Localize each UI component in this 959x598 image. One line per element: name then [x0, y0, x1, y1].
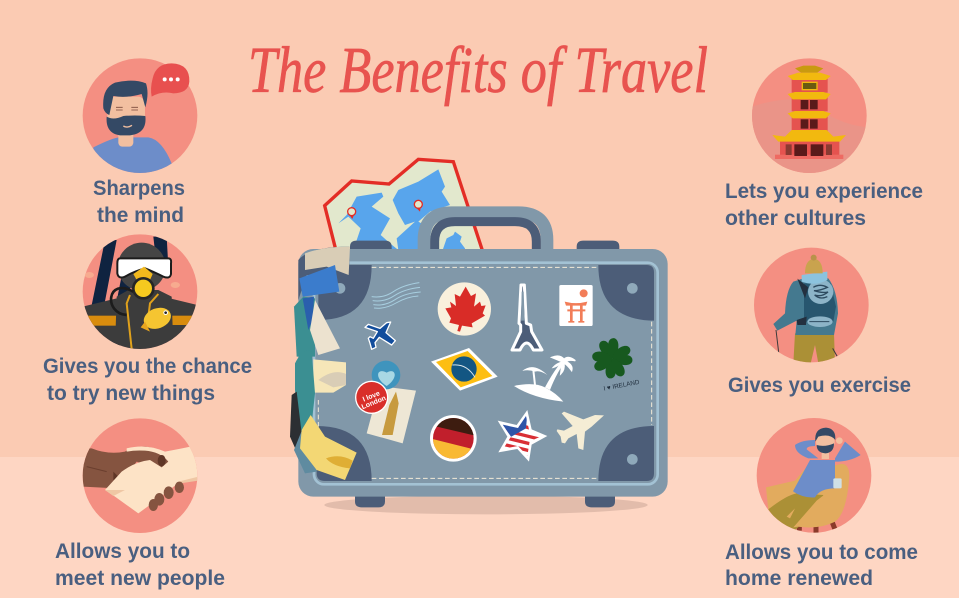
label: meet new people: Allows you to: [55, 540, 190, 563]
panel: experience other cultures: [725, 58, 923, 230]
sticker: usa star: [495, 410, 547, 462]
suitcase body: [298, 249, 668, 497]
icon: scuba diver with fish: [83, 234, 197, 349]
panel: come home renewed: [725, 418, 918, 590]
sticker: germany: [430, 415, 477, 462]
label: sharpens the mind: the mind: [97, 204, 184, 227]
label: experience other cultures: Lets you experience: [725, 180, 923, 203]
sticker: palm island: [514, 356, 575, 402]
suitcase illustration: [290, 159, 668, 514]
sticker: cream plane: [557, 412, 604, 450]
label: experience other cultures: other cultures: [725, 207, 866, 230]
icon: bearded man with speech bubble: [83, 58, 197, 183]
label: try new things: to try new things: [47, 382, 215, 405]
sticker: brazil flag: [431, 348, 498, 391]
suitcase shadow: [324, 496, 648, 514]
title: The Benefits of Travel: [248, 34, 708, 107]
label: come home renewed: Allows you to come: [725, 541, 918, 564]
panel: try new things: [43, 234, 252, 405]
sticker: eiffel tower: [512, 285, 542, 350]
icon: man relaxing in armchair: [757, 418, 871, 534]
rivets: [627, 283, 638, 294]
sticker: canada: [438, 282, 491, 336]
sticker: torii gate card: [559, 285, 593, 326]
icon: hiker: [754, 248, 869, 363]
travel scarf: [290, 247, 357, 480]
sticker: ireland clover: [591, 337, 641, 393]
corner guards: [317, 265, 654, 481]
label: try new things: Gives you the chance: [43, 355, 252, 378]
sticker: blue plane: [365, 322, 395, 349]
stitching: [318, 267, 652, 478]
sticker: london cluster: I love: [362, 390, 381, 403]
icon: handshake: [83, 418, 198, 533]
panel: exercise: [728, 248, 911, 397]
label: come home renewed: home renewed: [725, 567, 873, 590]
suitcase feet: [355, 493, 615, 507]
panel: sharpens the mind: [83, 58, 197, 227]
handle: [424, 213, 547, 252]
sticker: london cluster: [355, 361, 416, 443]
sticker: london cluster: London: [361, 395, 387, 411]
panel: meet new people: [55, 418, 225, 590]
clasps: [350, 241, 619, 250]
label: exercise: Gives you exercise: [728, 374, 911, 397]
label: sharpens the mind: Sharpens: [93, 177, 185, 200]
folded map: [325, 159, 483, 253]
icon: pagoda: [750, 58, 868, 177]
sticker: ireland clover: I ♥ IRELAND: [603, 379, 641, 393]
label: meet new people: meet new people: [55, 567, 225, 590]
postage wave lines: [372, 283, 421, 308]
